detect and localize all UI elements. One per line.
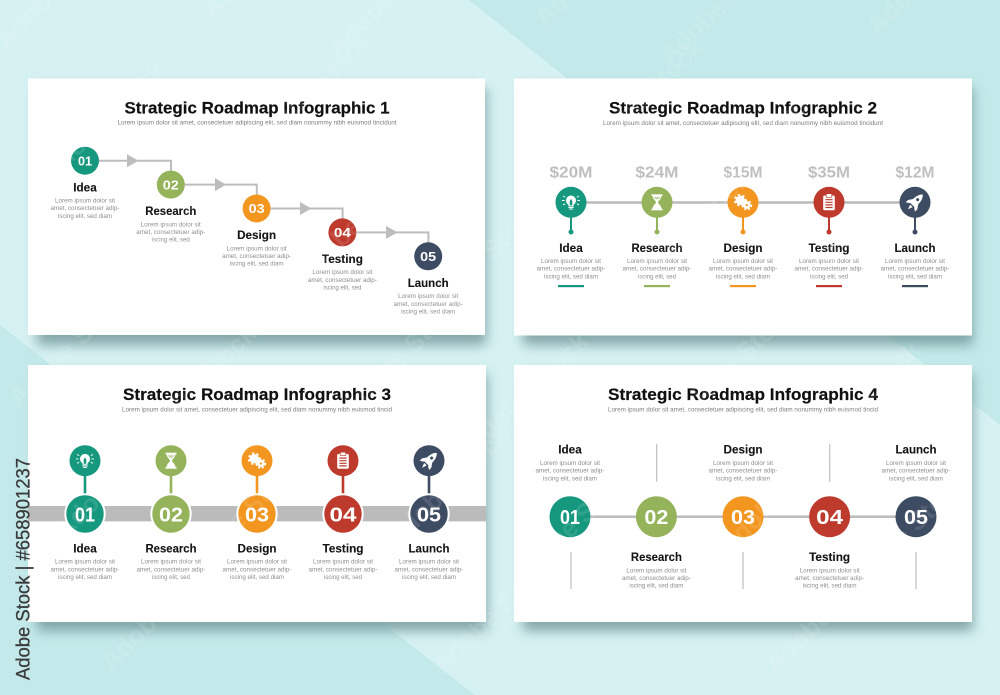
node 04 testing: iscing elit, sed xyxy=(324,574,363,581)
step 03 design xyxy=(708,443,778,537)
step 02 research: 02 xyxy=(644,506,668,529)
node 05 launch xyxy=(394,445,464,581)
step 03 design: amet, consectetuer adip- xyxy=(222,253,291,260)
step 03 design: amet, consectetuer adip- xyxy=(708,468,778,475)
milestone launch: iscing elit, sed diam xyxy=(888,273,942,280)
step 02 research: amet, consectetuer adip- xyxy=(136,229,205,236)
node 04 testing: Testing xyxy=(322,542,364,556)
panel: infographic 1 xyxy=(28,78,486,345)
step 05 launch: 05 xyxy=(904,506,928,529)
arrow 3 to 4 xyxy=(271,202,343,219)
step 05 launch xyxy=(882,443,950,537)
icon: clipboard xyxy=(337,452,349,469)
milestone design: Design xyxy=(724,241,762,255)
milestone design: Lorem ipsum dolor sit xyxy=(713,258,773,265)
node 03 design: Design xyxy=(238,542,276,556)
step 01 idea: amet, consectetuer adip- xyxy=(50,205,120,212)
step 05 launch: iscing elit, sed diam xyxy=(401,308,455,315)
step 03 design: iscing elit, sed diam xyxy=(716,475,770,482)
step 04 testing: Lorem ipsum dolor sit xyxy=(312,269,373,276)
step 01 idea: Idea xyxy=(73,180,97,194)
step 02 research: 02 xyxy=(163,177,179,192)
step 01 idea: amet, consectetuer adip- xyxy=(536,468,604,475)
node 03 design: Lorem ipsum dolor sit xyxy=(227,559,287,566)
step 01 idea: Idea xyxy=(558,443,582,457)
milestone idea: iscing elit, sed diam xyxy=(544,273,598,280)
milestone testing: amet, consectetuer adip- xyxy=(794,266,864,273)
milestone idea: amet, consectetuer adip- xyxy=(536,266,606,273)
dividers xyxy=(571,444,916,589)
step 01 idea: iscing elit, sed diam xyxy=(58,213,112,220)
node 05 launch: 05 xyxy=(417,503,441,526)
milestone testing xyxy=(794,164,864,287)
milestone research xyxy=(622,164,692,287)
text: Adobe Stock xyxy=(81,186,217,318)
node 01 idea: Idea xyxy=(73,542,97,556)
text: Adobe Stock xyxy=(505,458,641,590)
icon: rocket xyxy=(417,448,441,472)
arrow 4 to 5 xyxy=(356,226,428,243)
text: Adobe Stock xyxy=(48,412,184,544)
node 04 testing xyxy=(308,445,378,581)
node 01 idea: Lorem ipsum dolor sit xyxy=(55,559,115,566)
icon: light bulb xyxy=(562,196,580,210)
node 05 launch: Launch xyxy=(408,542,450,556)
icon: light bulb xyxy=(76,454,94,468)
node 04 testing: Lorem ipsum dolor sit xyxy=(313,559,373,566)
milestone idea xyxy=(536,164,606,287)
milestone design: iscing elit, sed diam xyxy=(716,273,770,280)
milestone testing: Lorem ipsum dolor sit xyxy=(799,258,859,265)
step 01 idea xyxy=(536,443,604,537)
panel: infographic 4 xyxy=(514,365,973,631)
milestone idea: $20M xyxy=(550,164,592,182)
node 02 research xyxy=(136,445,206,581)
text: Adobe Stock xyxy=(699,70,835,202)
text: Adobe Stock xyxy=(574,32,710,164)
subtitle 1: Lorem ipsum dolor sit amet, consectetuer adipiscing elit, sed diam nonummy nibh euismod tincidunt xyxy=(118,120,397,127)
arrow 2 to 3 xyxy=(185,178,257,195)
milestone design: amet, consectetuer adip- xyxy=(708,266,778,273)
step 04 testing: Lorem ipsum dolor sit xyxy=(800,567,860,574)
node 01 idea: amet, consectetuer adip- xyxy=(50,566,120,573)
milestone launch: amet, consectetuer adip- xyxy=(880,266,950,273)
panel: infographic 2 xyxy=(514,78,973,345)
step 04 testing xyxy=(308,218,377,292)
text: Adobe Stock xyxy=(367,62,503,194)
milestone research: amet, consectetuer adip- xyxy=(622,266,692,273)
step 04 testing: iscing elit, sed diam xyxy=(803,583,857,590)
step 04 testing: Testing xyxy=(809,550,850,564)
step 04 testing: Testing xyxy=(322,252,363,266)
milestone testing: Testing xyxy=(808,241,850,255)
node 04 testing: 04 xyxy=(330,503,357,526)
milestone launch: Launch xyxy=(894,241,936,255)
node 02 research: iscing elit, sed xyxy=(152,574,191,581)
step 02 research: Lorem ipsum dolor sit xyxy=(141,221,201,228)
icon: hourglass xyxy=(652,194,662,210)
step 03 design: Lorem ipsum dolor sit xyxy=(227,245,287,252)
text: Adobe Stock xyxy=(459,326,595,458)
text: Adobe Stock xyxy=(2,280,138,412)
arrow 1 to 2 xyxy=(99,154,171,171)
milestone launch xyxy=(880,164,950,287)
step 02 research xyxy=(622,496,691,590)
timeline line xyxy=(571,201,915,204)
step 01 idea: 01 xyxy=(560,506,580,529)
milestone design xyxy=(708,164,778,287)
step 01 idea: 01 xyxy=(78,153,92,168)
step 05 launch: iscing elit, sed diam xyxy=(889,475,943,482)
step 05 launch: Lorem ipsum dolor sit xyxy=(886,460,946,467)
text: Adobe Stock xyxy=(837,466,973,598)
node 05 launch: amet, consectetuer adip- xyxy=(394,566,464,573)
step 02 research: Research xyxy=(145,204,196,218)
node 02 research: 02 xyxy=(159,503,183,526)
step 05 launch: Launch xyxy=(408,276,449,290)
step 05 launch: Lorem ipsum dolor sit xyxy=(398,293,458,300)
text: Adobe Stock xyxy=(791,334,927,466)
node 03 design: amet, consectetuer adip- xyxy=(222,566,292,573)
text: Adobe Stock xyxy=(380,420,516,552)
grey band xyxy=(28,506,486,521)
text: Adobe Stock xyxy=(334,288,470,420)
node 03 design: iscing elit, sed diam xyxy=(230,574,284,581)
step 01 idea: iscing elit, sed diam xyxy=(543,475,597,482)
node 01 idea xyxy=(50,445,120,581)
step 04 testing: amet, consectetuer adip- xyxy=(795,575,864,582)
step 03 design: iscing elit, sed diam xyxy=(230,261,284,268)
node 02 research: Lorem ipsum dolor sit xyxy=(141,559,201,566)
node 05 launch: iscing elit, sed diam xyxy=(402,574,456,581)
text: Adobe Stock xyxy=(242,24,378,156)
step 05 launch: 05 xyxy=(420,249,436,264)
node 02 research: Research xyxy=(146,542,196,556)
step 02 research: Research xyxy=(631,550,682,564)
title 2: Strategic Roadmap Infographic 2 xyxy=(609,99,877,118)
node 01 idea: iscing elit, sed diam xyxy=(58,574,112,581)
step 03 design: Lorem ipsum dolor sit xyxy=(713,460,773,467)
milestone testing: $35M xyxy=(808,164,850,182)
icon: gears xyxy=(735,195,751,210)
step 03 design: 03 xyxy=(731,506,755,529)
step 05 launch: amet, consectetuer adip- xyxy=(394,301,463,308)
text: Adobe Stock xyxy=(173,450,309,582)
milestone research: iscing elit, sed xyxy=(638,273,677,280)
text: Adobe Stock xyxy=(620,164,756,296)
node 01 idea: 01 xyxy=(75,503,95,526)
milestone idea: Lorem ipsum dolor sit xyxy=(541,258,601,265)
milestone design: $15M xyxy=(724,164,762,182)
icon: hourglass xyxy=(166,453,176,469)
subtitle 4: Lorem ipsum dolor sit amet, consectetuer adipiscing elit, sed diam nonummy nibh euismod tincid xyxy=(608,407,878,414)
panel: infographic 3 xyxy=(28,365,487,631)
step 02 research: amet, consectetuer adip- xyxy=(622,575,691,582)
text: Adobe Stock xyxy=(94,544,230,676)
icon: clipboard xyxy=(823,194,835,210)
node 03 design: 03 xyxy=(245,503,269,526)
step 01 idea: Lorem ipsum dolor sit xyxy=(55,198,115,204)
milestone research: $24M xyxy=(636,164,678,182)
text: Adobe Stock xyxy=(413,194,549,326)
text: Adobe Stock xyxy=(426,547,562,679)
text: Adobe Stock xyxy=(712,428,848,560)
node 05 launch: Lorem ipsum dolor sit xyxy=(399,559,459,566)
step 05 launch xyxy=(394,242,463,315)
milestone idea: Idea xyxy=(559,241,583,255)
text: Adobe Stock xyxy=(666,296,802,428)
text: Adobe Stock xyxy=(35,54,171,186)
step 05 launch: amet, consectetuer adip- xyxy=(882,468,950,475)
step 04 testing xyxy=(795,496,864,590)
step 03 design: Design xyxy=(724,443,762,457)
step 04 testing: iscing elit, sed xyxy=(323,284,362,292)
step 02 research xyxy=(136,171,205,244)
timeline connector xyxy=(570,515,916,518)
text: Adobe Stock xyxy=(127,318,263,450)
icon: rocket xyxy=(903,190,927,214)
node 04 testing: amet, consectetuer adip- xyxy=(308,566,378,573)
milestone launch: $12M xyxy=(896,164,934,182)
milestone research: Research xyxy=(632,241,682,255)
milestone launch: Lorem ipsum dolor sit xyxy=(885,258,945,265)
milestone testing: iscing elit, sed xyxy=(810,273,849,280)
step 04 testing: amet, consectetuer adip- xyxy=(308,277,377,284)
title 3: Strategic Roadmap Infographic 3 xyxy=(123,385,391,404)
milestone research: Lorem ipsum dolor sit xyxy=(627,258,687,265)
step 02 research: iscing elit, sed diam xyxy=(629,583,683,590)
step 04 testing: 04 xyxy=(816,506,844,529)
step 03 design xyxy=(222,194,291,268)
step 02 research: iscing elit, sed xyxy=(152,237,190,244)
title 1: Strategic Roadmap Infographic 1 xyxy=(124,98,390,117)
text: Adobe Stock xyxy=(758,547,894,679)
step 02 research: Lorem ipsum dolor sit xyxy=(626,567,687,574)
step 05 launch: Launch xyxy=(896,443,936,457)
step 01 idea: Lorem ipsum dolor sit xyxy=(540,460,600,467)
stock id caption: Adobe Stock | #658901237 xyxy=(12,458,34,680)
text: Adobe Stock xyxy=(288,156,424,288)
step 03 design: Design xyxy=(237,228,276,242)
title 4: Strategic Roadmap Infographic 4 xyxy=(608,385,879,404)
node 02 research: amet, consectetuer adip- xyxy=(136,566,206,573)
icon: gears xyxy=(249,453,265,468)
text: Adobe Stock xyxy=(745,202,881,334)
subtitle 2: Lorem ipsum dolor sit amet, consectetuer adipiscing elit, sed diam nonummy nibh euismod tincidunt xyxy=(603,120,883,127)
node 03 design xyxy=(222,445,292,581)
step 04 testing: 04 xyxy=(334,225,352,240)
subtitle 3: Lorem ipsum dolor sit amet, consectetuer adipiscing elit, sed diam nonummy nibh euismod tincid xyxy=(122,407,392,414)
step 03 design: 03 xyxy=(249,201,265,216)
step 01 idea xyxy=(50,147,120,220)
